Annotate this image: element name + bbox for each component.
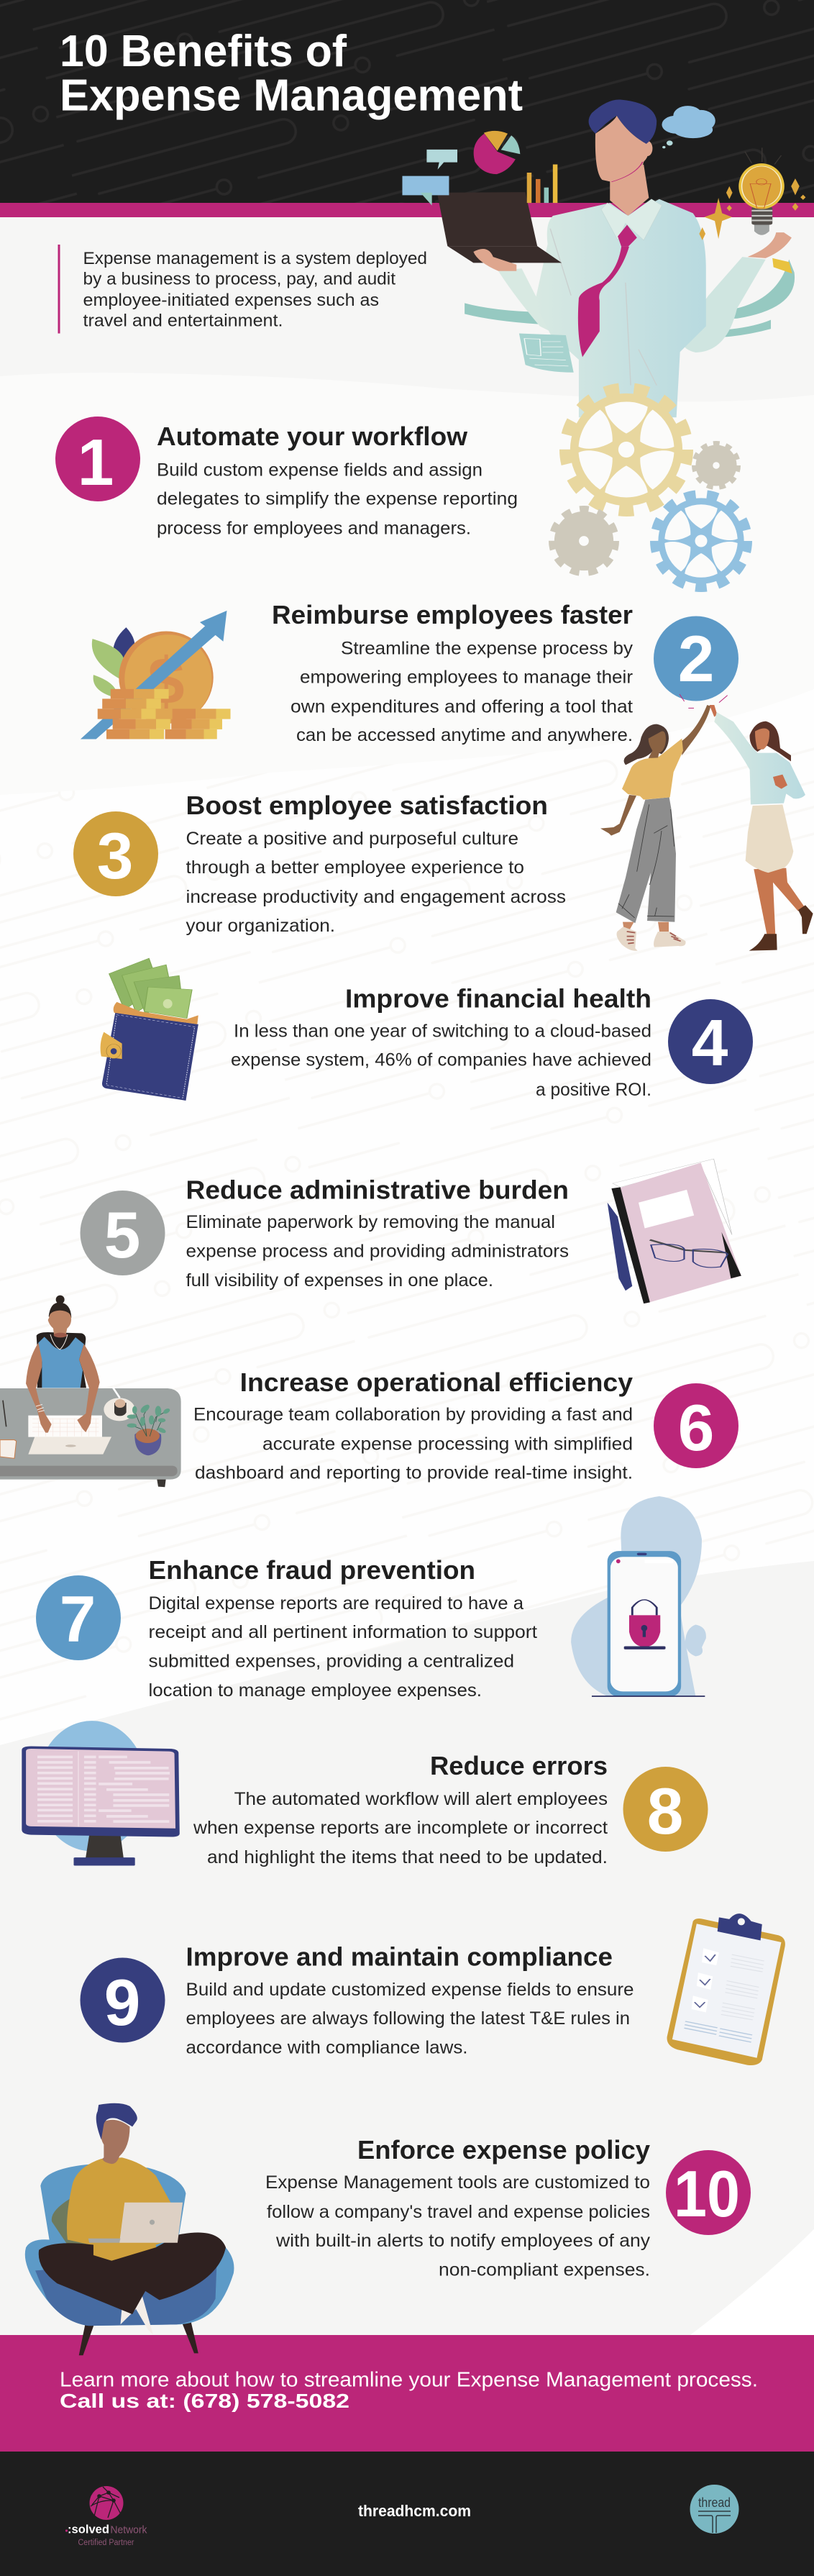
body 5: Eliminate paperwork by removing the manual [186, 1212, 555, 1232]
benefit 10 [265, 2135, 751, 2280]
number badge 6 [654, 1383, 738, 1468]
logo: thread [690, 2485, 739, 2534]
benefit 2 [272, 600, 738, 745]
head [48, 1296, 71, 1337]
collar and tie [578, 199, 662, 357]
number badge 4: 4 [692, 1007, 728, 1080]
body 1 [157, 460, 518, 538]
logo: isolved network: :solved [68, 2523, 109, 2536]
bar chart [527, 165, 557, 203]
number badge 9: 9 [104, 1967, 140, 2039]
icon: computer monitor [22, 1721, 180, 1866]
ground line [592, 1696, 705, 1697]
body 3 [186, 829, 566, 936]
icon: wallet with cash [101, 958, 198, 1101]
desk [0, 1388, 181, 1487]
number badge 4 [668, 999, 753, 1084]
number badge 6: 6 [678, 1392, 714, 1465]
pen on desk [3, 1401, 6, 1426]
number badge 8: 8 [647, 1775, 683, 1848]
illustration: gears [552, 388, 748, 588]
stand [74, 1835, 135, 1866]
icon: notebook, pen and glasses [608, 1159, 741, 1303]
benefit 6 [193, 1367, 738, 1483]
arms [26, 1343, 100, 1433]
number badge 7 [36, 1575, 121, 1660]
blue gear [654, 494, 748, 588]
thought cloud [662, 106, 715, 148]
screen [22, 1746, 180, 1837]
sparkle stars [699, 178, 805, 240]
wallet clasp [101, 1032, 122, 1059]
icon: coin, arrow and stacks [81, 611, 231, 739]
body 5: full visibility of expenses in one place. [186, 1270, 493, 1291]
board [667, 1919, 785, 2065]
body 9: employees are always following the latest T&E rules in [186, 2008, 630, 2029]
body 5 [186, 1212, 569, 1291]
body 10: non-compliant expenses. [439, 2260, 650, 2280]
benefit 3 [73, 791, 566, 936]
body 2: can be accessed anytime and anywhere. [296, 725, 633, 745]
padlock [624, 1600, 665, 1649]
glasses [650, 1240, 728, 1267]
heading 1: Automate your workflow [157, 422, 468, 451]
body 10 [265, 2172, 651, 2280]
sweater [67, 2157, 179, 2261]
benefit 9 [81, 1942, 634, 2058]
body 1: Build custom expense fields and assign [157, 460, 483, 480]
body 1: process for employees and managers. [157, 518, 471, 538]
body 4: a positive ROI. [536, 1080, 651, 1100]
heading 5: Reduce administrative burden [186, 1175, 569, 1204]
title: Expense Management [60, 71, 523, 121]
number badge 9 [81, 1958, 165, 2043]
body 10: follow a company's travel and expense policies [267, 2202, 650, 2222]
speech bubbles [402, 150, 457, 206]
CTA text: Learn more about how to streamline your Expense Management process. [60, 2369, 758, 2392]
number badge 1 [55, 417, 140, 501]
intro text block: Expense management is a system deployed [83, 249, 427, 268]
head [96, 2103, 137, 2164]
intro text block: employee-initiated expenses such as [83, 291, 379, 310]
body 9 [186, 1980, 634, 2058]
body 4 [231, 1021, 651, 1100]
open book [0, 1440, 17, 1458]
body 6: dashboard and reporting to provide real-time insight. [195, 1463, 633, 1483]
body 8: The automated workflow will alert employees [234, 1789, 608, 1809]
heading 7: Enhance fraud prevention [148, 1555, 475, 1585]
icon: phone with padlock [571, 1496, 706, 1697]
tablet [519, 334, 574, 373]
high five sparks [680, 694, 728, 708]
body 3: through a better employee experience to [186, 857, 524, 878]
coin dollar sign: $ [147, 645, 185, 718]
heading 6: Increase operational efficiency [240, 1367, 633, 1397]
body 7: location to manage employee expenses. [148, 1680, 482, 1701]
number badge 5 [81, 1191, 165, 1275]
number badge 2 [654, 616, 738, 701]
heading 9: Improve and maintain compliance [186, 1942, 613, 1971]
heading 2: Reimburse employees faster [272, 600, 633, 629]
body 4: expense system, 46% of companies have achieved [231, 1050, 651, 1070]
number badge 3: 3 [97, 820, 133, 893]
number badge 5: 5 [104, 1199, 140, 1272]
growth arrow [81, 611, 227, 739]
body 4: In less than one year of switching to a cloud-based [234, 1021, 651, 1042]
body 2 [291, 639, 634, 745]
torso [38, 1337, 84, 1388]
benefit 8 [193, 1751, 708, 1867]
coin stacks [98, 689, 231, 739]
armchair [25, 2164, 234, 2326]
benefit 5 [81, 1175, 569, 1291]
logo: isolved network [65, 2486, 147, 2547]
lines [721, 1954, 764, 2020]
raised hand [748, 232, 792, 258]
number badge 1: 1 [78, 427, 114, 499]
body 7 [148, 1593, 537, 1701]
coffee cup [104, 1387, 135, 1421]
cash bills [109, 958, 192, 1019]
body 7: Digital expense reports are required to have a [148, 1593, 523, 1614]
necklace [50, 1334, 68, 1350]
laptop [28, 1416, 111, 1455]
website: threadhcm.com [358, 2502, 471, 2520]
illustration: businessman with laptop and ideas [402, 99, 805, 417]
chair [37, 1332, 86, 1388]
pie chart [474, 131, 520, 174]
body 8: and highlight the items that need to be updated. [207, 1847, 608, 1867]
heading 10: Enforce expense policy [357, 2135, 650, 2165]
laptop [437, 192, 562, 271]
leaves [92, 627, 214, 724]
CTA text: Call us at: (678) 578-5082 [60, 2390, 349, 2412]
body 2: Streamline the expense process by [341, 639, 634, 659]
yellow gear [565, 388, 687, 511]
pen [608, 1203, 632, 1291]
pages [613, 1159, 732, 1234]
left woman [600, 705, 710, 951]
body 10: with built-in alerts to notify employees of any [275, 2231, 651, 2251]
number badge 10: 10 [674, 2158, 740, 2231]
body 5: expense process and providing administrators [186, 1242, 569, 1262]
body 7: submitted expenses, providing a centralized [148, 1652, 514, 1672]
body 8: when expense reports are incomplete or incorrect [193, 1818, 608, 1838]
body 3: increase productivity and engagement across [186, 887, 566, 907]
undershirt [52, 2198, 93, 2245]
laptop [88, 2203, 183, 2243]
body 8 [193, 1789, 608, 1867]
body 9: Build and update customized expense fields to ensure [186, 1980, 634, 2000]
body 6: Encourage team collaboration by providing a fast and [193, 1405, 633, 1425]
potted plant [127, 1403, 170, 1455]
wallet body [102, 1013, 198, 1101]
body 3: Create a positive and purposeful culture [186, 829, 518, 849]
body 3: your organization. [186, 916, 335, 936]
intro text block [58, 245, 427, 334]
body 9: accordance with compliance laws. [186, 2038, 467, 2058]
illustration: woman working at desk [0, 1296, 181, 1487]
body 10: Expense Management tools are customized to [265, 2172, 650, 2193]
benefit 4 [231, 984, 753, 1100]
benefit 7 [36, 1555, 537, 1701]
body 1: delegates to simplify the expense reporting [157, 488, 518, 509]
chair legs [79, 2322, 198, 2355]
header band [0, 0, 814, 217]
number badge 7: 7 [60, 1583, 96, 1656]
number badge 2: 2 [678, 623, 714, 696]
head [589, 99, 657, 216]
clip [718, 1913, 762, 1940]
logo: isolved network: Certified Partner [78, 2539, 134, 2547]
call to action band [0, 2335, 814, 2452]
shirt [498, 199, 766, 417]
title [60, 27, 523, 121]
heading 8: Reduce errors [430, 1751, 608, 1780]
title: 10 Benefits of [60, 27, 347, 76]
intro text block: by a business to process, pay, and audit [83, 270, 395, 289]
CTA text [60, 2369, 758, 2412]
blob backdrop [571, 1496, 706, 1696]
illustration: two women high five [600, 694, 813, 951]
light bulb [738, 147, 785, 235]
body 6 [193, 1405, 633, 1483]
phone body [608, 1551, 681, 1697]
logo: thread: thread [698, 2495, 731, 2510]
right woman [710, 705, 813, 951]
ribbon [465, 258, 795, 337]
number badge 3 [73, 811, 158, 896]
benefit 1 [55, 417, 518, 538]
footer band [0, 2452, 814, 2576]
icon: clipboard checklist [667, 1913, 785, 2065]
heading 3: Boost employee satisfaction [186, 791, 548, 820]
large grey gear [552, 509, 616, 573]
number badge 8 [623, 1767, 708, 1852]
body 7: receipt and all pertinent information to support [148, 1622, 537, 1642]
body 2: empowering employees to manage their [300, 668, 633, 688]
bracelets [36, 1404, 45, 1412]
feet [120, 2288, 153, 2335]
trousers [39, 2232, 226, 2314]
logo: isolved network: Network [111, 2524, 147, 2536]
body 2: own expenditures and offering a tool that [291, 696, 633, 716]
illustration: man on armchair with laptop [25, 2103, 234, 2355]
small grey gear [694, 443, 738, 488]
checkboxes [692, 1948, 719, 2012]
cover [618, 1162, 741, 1303]
intro text block: travel and entertainment. [83, 311, 283, 331]
paper [672, 1924, 781, 2058]
backdrop circle [37, 1721, 147, 1852]
body 6: accurate expense processing with simplified [262, 1434, 633, 1455]
heading 4: Improve financial health [345, 984, 651, 1014]
